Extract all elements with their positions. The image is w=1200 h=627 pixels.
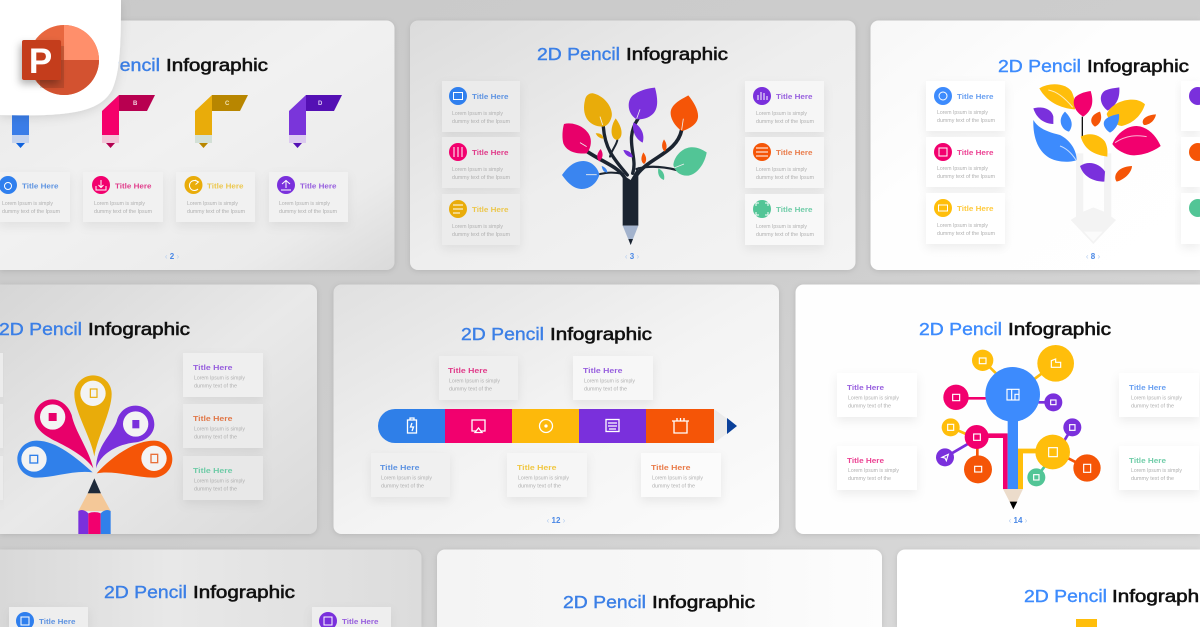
- pencil B: B: [133, 101, 138, 107]
- text card 1: [926, 81, 1005, 131]
- title: 2D Pencil: [537, 44, 620, 64]
- text card 1: dummy text of the: [848, 404, 891, 410]
- text card 3: Title Here: [193, 466, 232, 475]
- text card 6: [745, 194, 824, 245]
- text card C: [176, 172, 255, 222]
- title: 2D Pencil: [1024, 586, 1107, 606]
- text card 1: Lorem Ipsum is simply: [194, 376, 246, 382]
- text card 2: [926, 137, 1005, 187]
- text card 2: Title Here: [472, 148, 508, 157]
- text card 2: [442, 137, 520, 188]
- text card 1: Title Here: [472, 92, 508, 101]
- text card gold: [507, 453, 587, 497]
- page number: ‹ 2 ›: [165, 252, 179, 261]
- text card 3: [183, 456, 263, 500]
- cropped right cards: [1181, 81, 1200, 244]
- text card 1: [442, 81, 520, 132]
- pencil C: [195, 95, 248, 148]
- text card 3: dummy text of the Ipsum: [452, 232, 510, 238]
- text card 3: Title Here: [472, 205, 508, 214]
- text card 2: Title Here: [847, 456, 884, 465]
- text card 1: [183, 353, 263, 397]
- page number: ‹ 12 ›: [547, 516, 566, 525]
- text card pink: dummy text of the: [449, 386, 492, 392]
- text card 3: Lorem Ipsum is simply: [194, 478, 246, 484]
- text card 4: dummy text of the Ipsum: [756, 119, 814, 125]
- text card 2: [183, 404, 263, 448]
- text card D: Lorem Ipsum is simply: [279, 201, 331, 207]
- text card 2: dummy text of the Ipsum: [937, 174, 995, 180]
- text card 1: Title Here: [957, 92, 994, 101]
- text card 3: dummy text of the Ipsum: [937, 231, 995, 237]
- cropped left cards: [0, 353, 3, 500]
- text card right: Title Here: [342, 617, 378, 626]
- text card 1: Title Here: [193, 363, 232, 372]
- text card blue: [371, 453, 450, 497]
- text card 3: Title Here: [957, 204, 994, 213]
- pencil C: C: [225, 101, 230, 107]
- page number: ‹ 8 ›: [1086, 252, 1100, 261]
- text card 1: Title Here: [847, 383, 884, 392]
- text card purple: Title Here: [583, 366, 622, 375]
- text card gold: dummy text of the: [518, 484, 561, 490]
- text card gold: Lorem Ipsum is simply: [518, 476, 570, 482]
- text card 2: Title Here: [957, 148, 994, 157]
- text card purple: [573, 356, 653, 400]
- tree illustration: [562, 88, 707, 245]
- title: 2D Pencil: [0, 319, 82, 339]
- text card 5: Title Here: [776, 148, 812, 157]
- panel: slide 12 horizontal pencil: [334, 284, 779, 534]
- text card D: dummy text of the Ipsum: [279, 209, 337, 215]
- text card A: [0, 172, 70, 222]
- title: 2D Pencil: [563, 592, 646, 612]
- text card 2: [837, 446, 917, 490]
- text card 2: dummy text of the: [194, 434, 237, 440]
- text card blue: Title Here: [380, 463, 420, 472]
- text card 2: Title Here: [193, 414, 232, 423]
- panel: slide 8 leaf pencil: [870, 20, 1200, 270]
- text card 4: Lorem Ipsum is simply: [1131, 468, 1183, 474]
- icon: battery: [408, 418, 416, 433]
- title second word: Infographic: [652, 592, 755, 612]
- page number: ‹ 3 ›: [625, 252, 639, 261]
- text card 2: Lorem Ipsum is simply: [937, 166, 989, 172]
- text card A: Title Here: [22, 182, 58, 190]
- title second word: Infographic: [193, 582, 295, 602]
- text card orange: [641, 453, 721, 497]
- title second word: Infographic: [1008, 319, 1111, 339]
- title second word: Infographic: [626, 44, 728, 64]
- text card B: dummy text of the Ipsum: [94, 209, 152, 215]
- text card D: [269, 172, 348, 222]
- title: 2D Pencil: [104, 582, 187, 602]
- pencil B: [102, 95, 155, 148]
- text card 1: dummy text of the Ipsum: [937, 118, 995, 124]
- text card D: Title Here: [300, 182, 336, 190]
- text card B: Lorem Ipsum is simply: [94, 201, 146, 207]
- text card 4: Title Here: [776, 92, 812, 101]
- text card pink: [439, 356, 518, 400]
- text card 4: [1119, 446, 1199, 490]
- icon: screen: [472, 420, 485, 432]
- text card 3: Lorem Ipsum is simply: [452, 224, 504, 230]
- text card 3: [442, 194, 520, 245]
- text card right: [312, 607, 391, 627]
- title: 2D Pencil: [461, 324, 544, 344]
- text card 1: dummy text of the: [194, 384, 237, 390]
- text card 1: Lorem Ipsum is simply: [848, 396, 900, 402]
- text card B: Title Here: [115, 182, 152, 190]
- text card C: Title Here: [207, 182, 244, 190]
- text card 6: Lorem Ipsum is simply: [756, 224, 808, 230]
- text card 2: Lorem Ipsum is simply: [848, 468, 900, 474]
- title second word: Infographic: [1087, 56, 1189, 76]
- icon: frame: [672, 418, 689, 433]
- title: 2D Pencil: [919, 319, 1002, 339]
- text card C: dummy text of the Ipsum: [187, 209, 245, 215]
- text card gold: Title Here: [517, 463, 556, 472]
- PowerPoint logo badge: [0, 0, 121, 115]
- text card 3: dummy text of the: [194, 486, 237, 492]
- panel: bottom left slide: [0, 550, 422, 627]
- text card 1: dummy text of the Ipsum: [452, 119, 510, 125]
- icon: target: [540, 420, 552, 432]
- text card 4: Lorem Ipsum is simply: [756, 111, 808, 117]
- pencil A: [12, 100, 29, 148]
- text card 4: dummy text of the: [1131, 476, 1174, 482]
- text card 3: Lorem Ipsum is simply: [1131, 396, 1183, 402]
- text card left: [9, 607, 88, 627]
- text card 3: Title Here: [1129, 383, 1166, 392]
- panel: slide 14 circle tree: [796, 284, 1200, 534]
- panel: bottom right slide: [897, 550, 1200, 627]
- icon: PowerPoint logo: P: [29, 42, 52, 81]
- text card 2: dummy text of the Ipsum: [452, 175, 510, 181]
- text card 5: Lorem Ipsum is simply: [756, 167, 808, 173]
- text card 6: Title Here: [776, 205, 812, 214]
- text card blue: Lorem Ipsum is simply: [381, 476, 433, 482]
- icon: keyboard: [606, 420, 619, 432]
- title second word: Infographic: [166, 55, 268, 75]
- text card 5: dummy text of the Ipsum: [756, 175, 814, 181]
- text card orange: Title Here: [651, 463, 690, 472]
- text card C: Lorem Ipsum is simply: [187, 201, 239, 207]
- text card 3: dummy text of the: [1131, 404, 1174, 410]
- title second word: Infographic: [550, 324, 652, 344]
- text card 3: Lorem Ipsum is simply: [937, 223, 989, 229]
- text card 4: Title Here: [1129, 456, 1166, 465]
- text card 6: dummy text of the Ipsum: [756, 232, 814, 238]
- text card 2: Lorem Ipsum is simply: [194, 426, 246, 432]
- gold shape: [1076, 619, 1097, 627]
- title second word: Infographic: [1112, 586, 1200, 606]
- panel: bottom centre slide: [437, 550, 882, 627]
- title: 2D Pencil: [998, 56, 1081, 76]
- text card 2: dummy text of the: [848, 476, 891, 482]
- text card left: Title Here: [39, 617, 76, 626]
- panel: slide 2 arrow pencils: [0, 20, 394, 270]
- text card 1: [837, 373, 917, 417]
- text card pink: Title Here: [448, 366, 488, 375]
- leaf pencil illustration: [1033, 84, 1161, 244]
- text card A: dummy text of the Ipsum: [2, 209, 60, 215]
- page number: ‹ 14 ›: [1009, 516, 1028, 525]
- panel: slide 3 pencil tree: [410, 20, 856, 270]
- text card purple: dummy text of the: [584, 386, 627, 392]
- text card blue: dummy text of the: [381, 484, 424, 490]
- flower pencil illustration: [17, 375, 172, 534]
- text card 3: [1119, 373, 1199, 417]
- circle tree illustration: [936, 345, 1101, 509]
- text card purple: Lorem Ipsum is simply: [584, 378, 636, 384]
- text card 3: [926, 193, 1005, 244]
- text card orange: Lorem Ipsum is simply: [652, 476, 704, 482]
- pencil D: [289, 95, 342, 148]
- title second word: Infographic: [88, 319, 190, 339]
- title: 2D Pencil: [76, 55, 160, 75]
- text card orange: dummy text of the: [652, 484, 695, 490]
- panel: slide pencil flower: [0, 284, 317, 534]
- text card 2: Lorem Ipsum is simply: [452, 167, 504, 173]
- horizontal pencil bar: [378, 409, 737, 443]
- text card 5: [745, 137, 824, 188]
- text card pink: Lorem Ipsum is simply: [449, 378, 501, 384]
- text card 1: Lorem Ipsum is simply: [937, 110, 989, 116]
- text card A: Lorem Ipsum is simply: [2, 201, 54, 207]
- text card B: [83, 172, 163, 222]
- pencil D: D: [318, 101, 323, 107]
- text card 4: [745, 81, 824, 132]
- text card 1: Lorem Ipsum is simply: [452, 111, 504, 117]
